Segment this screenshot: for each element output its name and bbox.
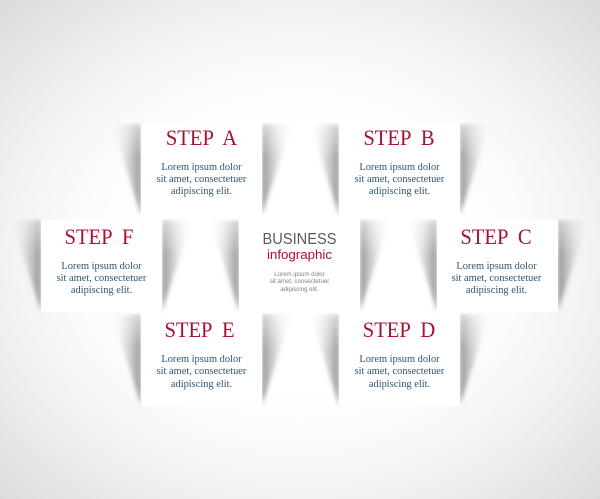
card: step B: STEP B [363, 124, 435, 150]
card: step E: STEP E [164, 317, 235, 342]
card: step B [355, 124, 444, 197]
card: center title: Lorem ipsum dolor sit amet, consectetuer adipiscing elit. [270, 270, 329, 292]
card: step F: Lorem ipsum dolor sit amet, consectetuer adipiscing elit. [57, 260, 146, 296]
card: step C: Lorem ipsum dolor sit amet, consectetuer adipiscing elit. [452, 260, 541, 296]
card: step C: STEP C [460, 224, 532, 248]
card: step D: Lorem ipsum dolor sit amet, consectetuer adipiscing elit. [355, 354, 444, 390]
card: step A: STEP A [166, 124, 237, 150]
paper cards and fold shadows [19, 123, 581, 404]
card: step D [355, 317, 444, 390]
card: step E: Lorem ipsum dolor sit amet, consectetuer adipiscing elit. [157, 354, 246, 390]
card: step A: Lorem ipsum dolor sit amet, consectetuer adipiscing elit. [157, 162, 246, 197]
card: center title: BUSINESS [263, 231, 336, 248]
card: step F: STEP F [65, 224, 133, 248]
card: step C [452, 224, 542, 296]
card: center title [263, 231, 336, 292]
card: step D: STEP D [363, 317, 435, 342]
card: center title: infographic [267, 247, 332, 262]
card: step F [57, 224, 146, 296]
card: step B: Lorem ipsum dolor sit amet, consectetuer adipiscing elit. [355, 162, 444, 197]
card: step E [157, 317, 246, 390]
card: step A [157, 124, 246, 197]
